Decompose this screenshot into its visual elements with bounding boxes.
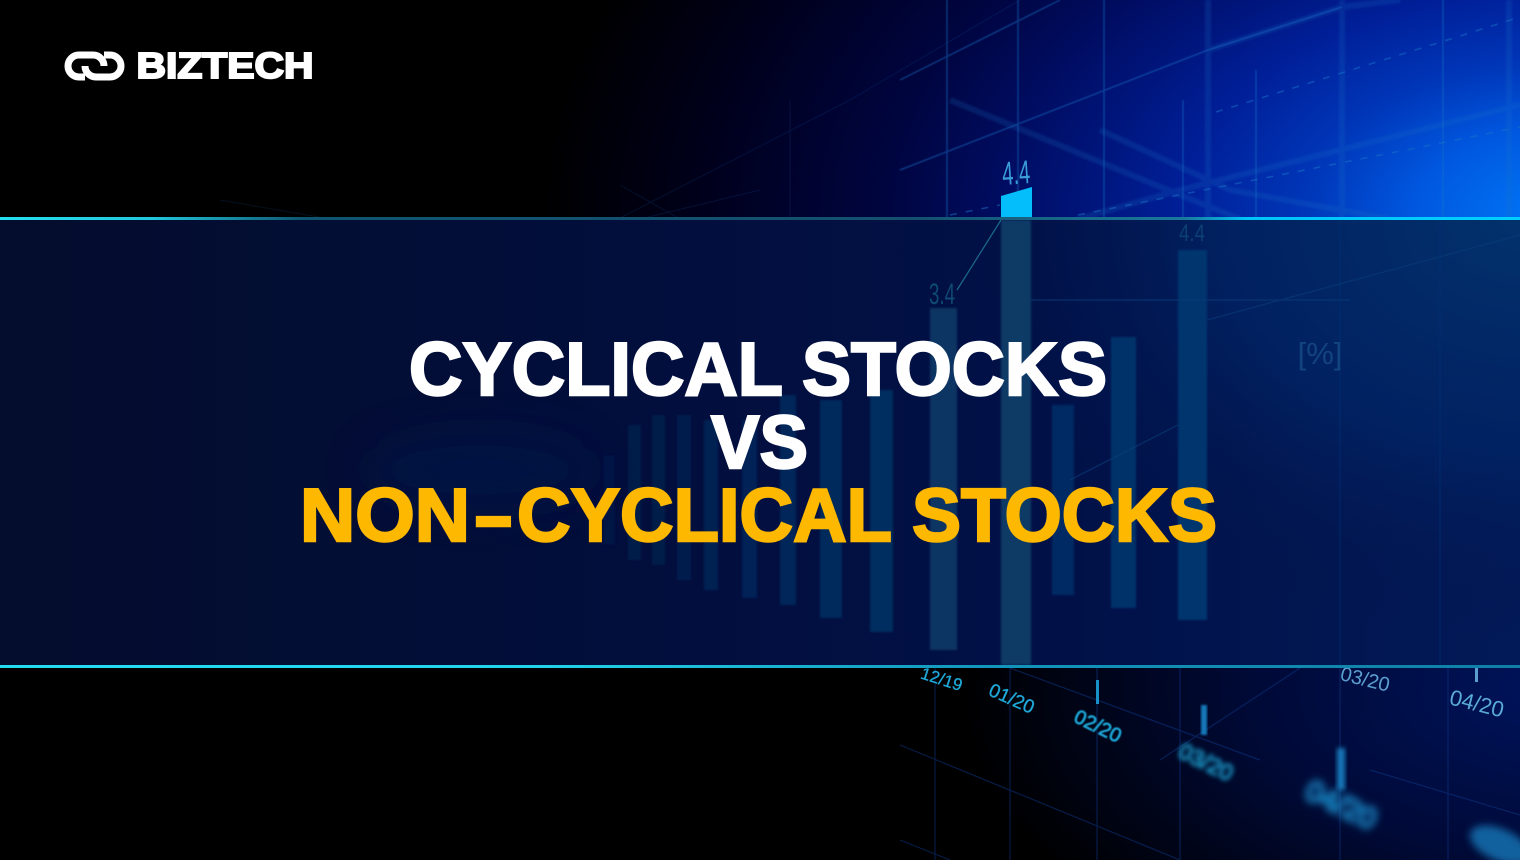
date labels: 04/20: [1447, 685, 1507, 722]
headline line 3: -: [473, 473, 514, 557]
date labels: 01/20: [985, 680, 1037, 719]
headline: [300, 327, 1217, 557]
bright bar top: [1001, 187, 1032, 219]
headline line 1: CYCLICAL: [409, 327, 783, 411]
date labels: 03/20: [1338, 663, 1392, 697]
date labels: 04/20: [1300, 774, 1382, 837]
faded value labels: 3.4: [929, 278, 955, 311]
faded percent label: [%]: [1298, 336, 1342, 371]
bottom accent line: [0, 665, 1520, 668]
date labels: 03/20: [1174, 738, 1238, 786]
date labels: 02/20: [1070, 706, 1125, 748]
central title panel: [0, 219, 1520, 666]
logo: [68, 45, 314, 86]
headline line 2: VS: [711, 400, 808, 484]
top accent line: [0, 217, 1520, 220]
date labels: 12/19: [918, 664, 965, 695]
headline line 1: STOCKS: [802, 327, 1107, 411]
headline line 3: NON: [300, 473, 470, 557]
icon: chain link: [68, 55, 121, 77]
brand name: BIZTECH: [136, 45, 314, 86]
date labels: [918, 663, 1507, 837]
blurred tick marks and lower right glow: [1096, 668, 1520, 860]
headline line 3: CYCLICAL: [517, 473, 892, 557]
headline line 3: STOCKS: [912, 473, 1217, 557]
value label 4.4: 4.4: [1001, 153, 1031, 192]
faded bar chart inside panel: 4.4: [1179, 220, 1205, 247]
headline line 1: [409, 327, 1107, 411]
faded bar chart inside panel: [365, 220, 1520, 665]
headline line 3: [300, 473, 1217, 557]
